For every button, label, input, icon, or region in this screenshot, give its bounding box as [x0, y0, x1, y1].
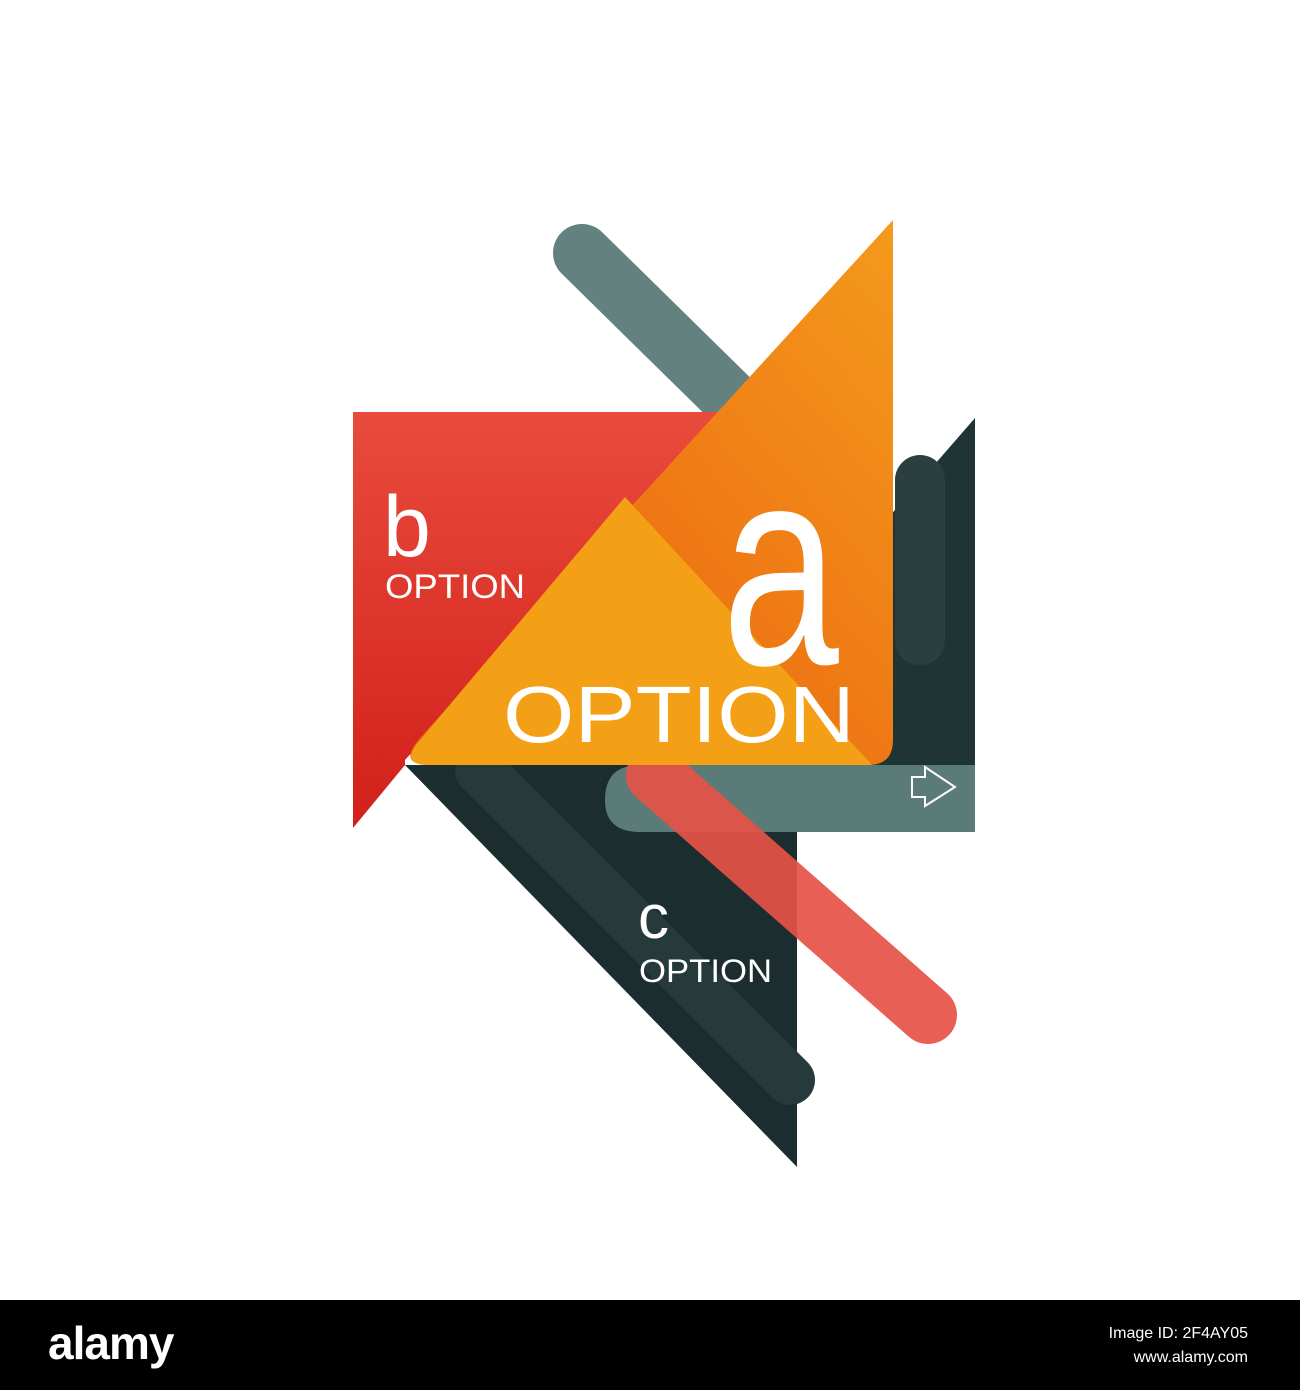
- dark right triangle: [615, 418, 975, 832]
- bottom bar: [0, 1300, 1300, 1390]
- label a: OPTION: [503, 670, 855, 759]
- bottom bar: alamy: [48, 1317, 173, 1369]
- bottom bar: www.alamy.com: [1134, 1349, 1248, 1366]
- label a: a: [722, 407, 839, 724]
- label b: b: [383, 479, 431, 575]
- label b: OPTION: [385, 568, 525, 606]
- red diagonal bar: [655, 775, 928, 1015]
- red panel b: [353, 412, 722, 828]
- gray bottom strip: [605, 765, 975, 832]
- orange triangle a: [410, 220, 893, 765]
- dark bottom triangle: [405, 765, 797, 1167]
- gray diagonal bar: [582, 253, 925, 590]
- label c: c: [638, 883, 669, 952]
- icon: arrow: [912, 767, 955, 806]
- label b: [383, 479, 525, 606]
- label a: [503, 407, 855, 759]
- bottom bar: Image ID: 2F4AY05: [1109, 1325, 1248, 1342]
- label c: [638, 883, 772, 989]
- label c: OPTION: [639, 953, 772, 989]
